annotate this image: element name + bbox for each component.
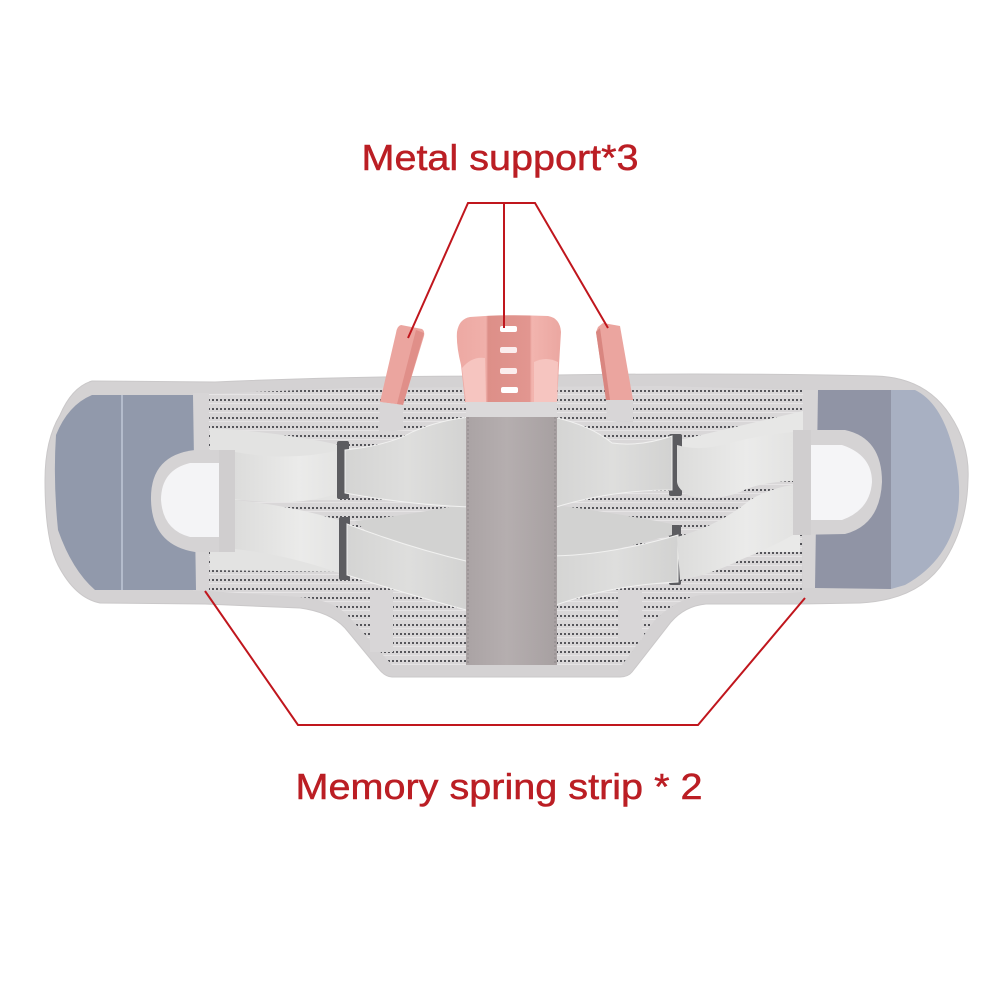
left hook tab	[151, 450, 235, 552]
center-right upper strap	[553, 417, 672, 508]
left lower outer strap	[235, 500, 345, 575]
mesh panel	[208, 386, 803, 665]
back strap layer lower right	[760, 530, 800, 552]
center-left lower strap	[347, 524, 470, 611]
center-left upper strap	[345, 417, 470, 507]
metal support: center stay	[457, 315, 561, 402]
heading: metal support label: Metal support*3	[362, 137, 638, 178]
heading: memory spring strip label: Memory spring strip * 2	[296, 766, 702, 807]
center taupe panel	[466, 402, 557, 665]
tape under right stay	[606, 400, 633, 425]
right fabric panel	[815, 390, 959, 589]
buckle: right lower	[669, 525, 681, 585]
back strap inner left	[355, 503, 470, 565]
buckle: left lower	[339, 517, 350, 580]
buckle: right upper	[669, 434, 682, 496]
left upper outer strap	[235, 450, 342, 502]
left fabric panel	[55, 395, 196, 590]
back strap layer lower left	[210, 540, 340, 572]
belt body	[45, 374, 968, 677]
back strap layer left	[210, 428, 340, 500]
buckle: left upper	[337, 441, 349, 499]
right lower outer strap	[677, 485, 793, 580]
metal support: right stay	[596, 323, 633, 400]
belt outline	[45, 374, 968, 677]
callout lines: metal support	[408, 203, 608, 338]
side tape strips on mesh	[370, 590, 393, 652]
metal support: left stay	[380, 325, 424, 405]
back strap inner right	[555, 505, 672, 565]
right hook tab	[793, 430, 882, 535]
right upper outer strap	[677, 432, 793, 498]
tape under left stay	[379, 402, 403, 433]
back strap layer right	[680, 411, 803, 480]
center-right lower strap	[553, 535, 678, 606]
callout lines: memory spring strip	[205, 591, 805, 725]
